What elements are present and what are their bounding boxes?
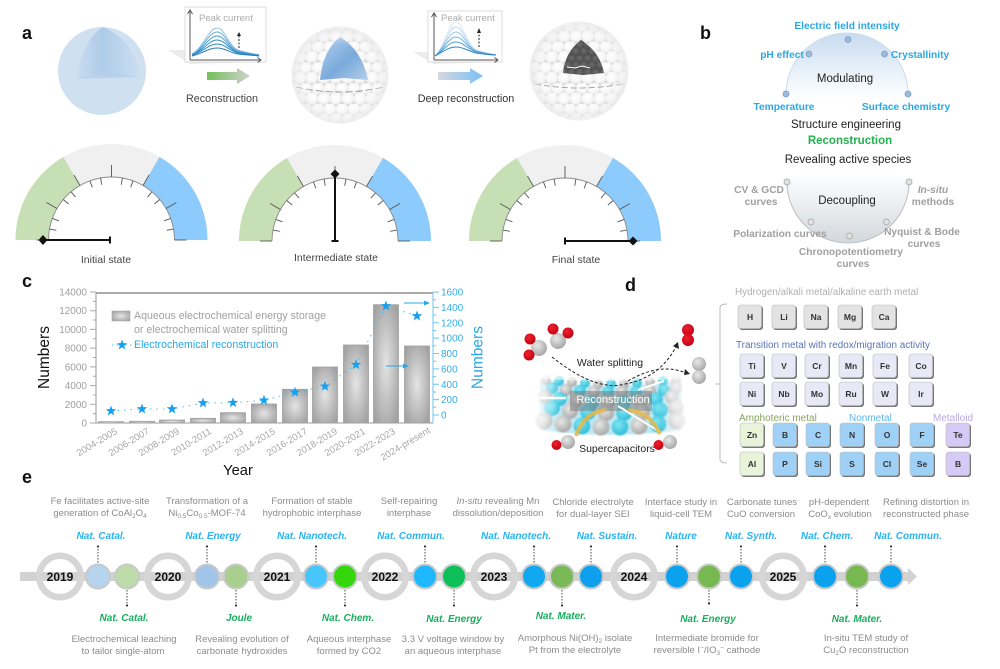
descriptions above timeline: In-situ revealing Mn [457,496,539,507]
factors around modulating dome: Temperature [754,102,815,113]
right axis labels: 200 [441,395,458,406]
category: transition metals: Mo [811,389,823,399]
category: nonmetals: C [815,430,821,440]
descriptions below timeline: Intermediate bromide for [655,633,759,644]
left axis labels: 12000 [59,306,87,317]
category: transition metals: Ni [748,389,756,399]
dotted connectors [97,545,892,607]
category: transition metals: Cr [812,361,822,371]
journal labels above timeline: Nat. Commun. [874,531,942,542]
legend [112,310,326,351]
journal labels above timeline: Nat. Nanotech. [481,531,551,542]
year rings: 2022 [372,570,399,584]
right axis labels [441,288,464,422]
category: hydrogen, alkali and alkaline earth: Li [780,312,788,322]
methods around decoupling dome: curves [745,197,778,208]
category: transition metals: Ir [918,389,925,399]
panel e: timeline [20,467,969,657]
dashed arrows: water splitting paths [552,342,690,385]
event nodes [86,564,903,588]
factors around modulating dome: Electric field intensity [794,21,900,32]
methods around decoupling dome: curves [908,239,941,250]
journal labels below timeline: Nat. Energy [426,614,482,625]
left axis labels: 6000 [65,362,87,373]
panel b: modulating and decoupling [700,21,960,270]
descriptions below timeline: Pt from the electrolyte [529,645,621,656]
label: final state: Final state [552,254,600,266]
category: amphoteric metals: Zn [747,430,757,440]
category: nonmetals: N [849,430,855,440]
bracket [715,304,727,463]
arrow: reconstruction [207,68,250,84]
descriptions below timeline: Amorphous Ni(OH) [518,633,599,644]
panel a: reconstruction process [16,7,661,266]
timeline bar with arrowhead [20,568,917,585]
category: metalloids: Te [953,430,963,440]
descriptions below timeline: Aqueous interphase [307,634,391,645]
right axis labels: 1400 [441,303,464,314]
category: nonmetals: Se [917,459,927,469]
descriptions below timeline: 2 [599,638,603,645]
descriptions above timeline: interphase [387,508,431,519]
journal labels above timeline: Nat. Sustain. [577,531,637,542]
methods around decoupling dome: CV & GCD [734,185,784,196]
descriptions above timeline: pH-dependent [809,497,869,508]
left axis labels: 0 [81,418,87,430]
text: revealing active species: Revealing active species [785,154,912,166]
journal labels above timeline: Nat. Commun. [377,531,445,542]
x axis labels: 2008-2009 [137,426,182,459]
chart axes [90,292,439,423]
text: structure engineering: Structure engineering [791,119,901,131]
descriptions above timeline: Co [186,508,199,519]
descriptions above timeline: generation of CoAl [53,508,132,519]
reconstructed surface atoms [530,368,692,445]
journal labels above timeline: Nat. Synth. [725,531,777,542]
right axis labels: 0 [441,410,447,422]
panel label d: d [625,275,636,295]
x axis labels: 2012-2013 [201,426,246,459]
right axis labels: 800 [441,349,458,360]
category: metalloids [933,413,973,477]
category: amphoteric metals: Al [748,459,756,469]
year rings: 2021 [264,570,291,584]
category: transition metals [736,340,934,407]
x axis labels [75,425,433,463]
journal labels below timeline [100,611,882,625]
sphere: core-shell intermediate [292,26,388,124]
descriptions below timeline: In-situ TEM study of [824,633,909,644]
descriptions above timeline: Formation of stable [271,496,353,507]
axis title: Year: Year [223,463,253,479]
arrow: 2024 star to right axis [386,364,409,368]
descriptions above timeline: Interface study in [645,497,717,508]
descriptions below timeline: isolate [602,633,632,644]
category: nonmetals: P [782,459,788,469]
chart: peak current, deep reconstruction: Peak current [441,13,495,24]
year rings: 2025 [770,570,797,584]
descriptions below timeline: Cu [823,645,835,656]
year rings: 2024 [621,570,648,584]
descriptions above timeline: -MOF-74 [208,508,246,519]
molecules: reactants [524,324,574,360]
x axis labels: 2010-2011 [170,426,214,459]
category: nonmetals: O [884,430,891,440]
descriptions above timeline: x [828,514,832,521]
methods around decoupling dome: methods [912,197,955,208]
left axis labels: 2000 [65,400,87,411]
descriptions below timeline: to tailor single-atom [82,646,165,657]
journal labels below timeline: Nat. Mater. [536,611,586,622]
x axis labels: 2016-2017 [265,426,310,459]
category: metalloids: B [955,459,961,469]
descriptions below timeline: − [720,645,724,652]
category: nonmetals: B [782,430,788,440]
descriptions above timeline: O [136,508,143,519]
factors around modulating dome: pH effect [760,50,804,61]
category: hydrogen, alkali and alkaline earth: Na [811,312,822,322]
factors around modulating dome: Crystallinity [891,50,949,61]
x axis labels: 2014-2015 [233,426,278,459]
bars [98,305,430,423]
left axis labels: 4000 [65,381,87,392]
text: reconstruction: Reconstruction [808,135,892,147]
right axis labels: 1200 [441,318,464,329]
descriptions above timeline: CoO [808,509,828,520]
category: nonmetals: Cl [883,459,891,469]
category: hydrogen, alkali and alkaline earth [735,287,918,330]
label: deep reconstruction: Deep reconstruction [418,93,514,105]
molecules: products [682,324,706,384]
sphere: initial bulk particle [58,27,146,115]
methods around decoupling dome [733,185,960,270]
category: transition metals: W [881,389,890,399]
chart: peak current, reconstruction [168,7,266,64]
category: transition metals: Ru [845,389,857,399]
journal labels below timeline: Nat. Mater. [832,614,882,625]
year rings: 2019 [47,570,74,584]
label: initial state: Initial state [81,254,131,266]
category: hydrogen, alkali and alkaline earth: H [747,312,753,322]
descriptions below timeline: formed by CO2 [317,646,381,657]
journal labels above timeline: Nat. Chem. [801,531,853,542]
panel d: surface reactions and element table [524,275,973,477]
year rings [39,556,804,597]
left axis labels: 8000 [65,344,87,355]
legend: Aqueous electrochemical energy storage [134,310,326,322]
arrow: stars to right axis [404,300,430,306]
category: metalloids: Metalloid [933,413,973,424]
descriptions below timeline: /IO [704,645,717,656]
category: hydrogen, alkali and alkaline earth: Hydrogen/alkali metal/alkaline earth metal [735,287,918,298]
descriptions above timeline: CuO conversion [727,509,795,520]
descriptions above timeline: 0.5 [199,513,208,520]
methods around decoupling dome: Polarization curves [733,229,827,240]
journal labels above timeline: Nat. Catal. [77,531,125,542]
journal labels above timeline: Nat. Nanotech. [277,531,347,542]
star series: electrochemical reconstruction [106,300,422,415]
descriptions below timeline: an aqueous interphase [405,646,501,657]
factors around modulating dome [754,21,950,113]
methods around decoupling dome: Nyquist & Bode [884,227,960,238]
year rings: 2020 [155,570,182,584]
x axis labels: 2022-2023 [353,426,398,459]
right axis labels: 1600 [441,288,464,298]
x axis labels: 2006-2007 [107,426,152,459]
journal labels above timeline: Nat. Energy [185,531,241,542]
gauge: initial state [16,144,208,245]
descriptions above timeline: Carbonate tunes [727,497,797,508]
category: hydrogen, alkali and alkaline earth: Mg [844,312,856,322]
legend: or electrochemical water splitting [134,324,288,336]
category: amphoteric metals: Amphoteric metal [739,413,817,424]
descriptions below timeline: O reconstruction [839,645,909,656]
category: transition metals: Mn [845,361,857,371]
x axis labels: 2020-2021 [323,426,368,459]
text: Modulating: Modulating [817,73,873,85]
descriptions below timeline: cathode [724,645,760,656]
category: transition metals: Co [915,361,927,371]
dome: modulating [783,33,911,110]
text: water splitting: Water splitting [577,357,643,369]
journal labels below timeline: Nat. Energy [680,614,736,625]
category: transition metals: Transition metal with redox/migration activity [736,340,930,351]
factors around modulating dome: Surface chemistry [862,102,950,113]
descriptions below timeline: 3 [717,650,721,657]
dome: decoupling [784,166,912,243]
gauge: intermediate state [239,145,431,241]
descriptions above timeline: Refining distortion in [883,497,969,508]
category: amphoteric metals [739,413,817,477]
chart: peak current, deep reconstruction [413,11,502,64]
descriptions above timeline: Fe facilitates active-site [51,496,149,507]
descriptions below timeline: − [700,645,704,652]
text: Decoupling: Decoupling [818,195,876,207]
descriptions below timeline: 3.3 V voltage window by [402,634,504,645]
category: transition metals: Fe [880,361,890,371]
panel label e: e [22,467,32,487]
descriptions above timeline: reconstructed phase [883,509,969,520]
descriptions above timeline [51,496,969,521]
descriptions above timeline: 2 [132,513,136,520]
journal labels below timeline: Nat. Catal. [100,613,148,624]
methods around decoupling dome: In-situ [918,185,949,196]
panel label b: b [700,23,711,43]
descriptions below timeline [71,633,909,657]
right axis labels: 1000 [441,334,464,345]
descriptions below timeline: Electrochemical leaching [71,634,177,645]
descriptions above timeline: Ni [168,508,177,519]
x axis labels: 2004-2005 [75,426,120,459]
legend: Electrochemical reconstruction [134,339,278,351]
left axis labels: 14000 [59,288,87,298]
category: nonmetals: Nonmetal [849,413,892,424]
descriptions above timeline: Transformation of a [166,496,249,507]
panel label c: c [22,271,32,291]
descriptions above timeline: hydrophobic interphase [263,508,361,519]
journal labels above timeline: Nature [665,531,697,542]
axis title: left Numbers: Numbers [36,326,53,389]
category: nonmetals: S [849,459,855,469]
label: reconstruction: Reconstruction [186,93,258,105]
chart: peak current, reconstruction: Peak current [199,13,253,24]
descriptions above timeline: 0.5 [177,513,187,520]
journal labels above timeline [77,531,942,542]
category: nonmetals [773,413,935,477]
descriptions above timeline: liquid-cell TEM [650,509,712,520]
category: transition metals: Ti [748,361,756,371]
descriptions below timeline: reversible I [654,645,700,656]
right axis labels: 400 [441,380,458,391]
sphere: fully reconstructed particle [530,22,628,120]
x axis labels: 2018-2019 [295,426,340,459]
left axis labels [59,288,87,430]
x axis labels: 2024-present [379,425,433,463]
right axis labels: 600 [441,364,458,375]
axis title: right Numbers: Numbers [470,326,486,389]
category: transition metals: Nb [778,389,790,399]
descriptions above timeline: 4 [143,513,147,520]
descriptions above timeline: for dual-layer SEI [556,509,630,520]
year rings: 2023 [481,570,508,584]
methods around decoupling dome: curves [837,259,870,270]
label: intermediate state: Intermediate state [294,252,378,264]
descriptions above timeline: dissolution/deposition [453,508,543,519]
journal labels below timeline: Nat. Chem. [322,613,374,624]
molecules: supercapacitor ions [552,435,677,450]
arrow: deep reconstruction [438,68,483,84]
descriptions above timeline: Self-repairing [381,496,437,507]
methods around decoupling dome: Chronopotentiometry [799,247,903,258]
panel label a: a [22,23,33,43]
category: nonmetals: F [919,430,925,440]
descriptions below timeline: carbonate hydroxides [197,646,288,657]
category: hydrogen, alkali and alkaline earth: Ca [879,312,890,322]
descriptions below timeline: 2 [835,650,839,657]
descriptions below timeline: Revealing evolution of [195,634,289,645]
category: nonmetals: Si [814,459,822,469]
text: supercapacitors: Supercapacitors [579,443,655,455]
text: Reconstruction on surface: Reconstruction [576,394,650,406]
descriptions above timeline: Chloride electrolyte [552,497,634,508]
gauge: final state [469,145,661,246]
category: transition metals: V [781,361,787,371]
left axis labels: 10000 [59,325,87,336]
journal labels below timeline: Joule [226,613,252,624]
descriptions above timeline: evolution [831,509,872,520]
panel c: publication bar and star chart [22,271,486,479]
